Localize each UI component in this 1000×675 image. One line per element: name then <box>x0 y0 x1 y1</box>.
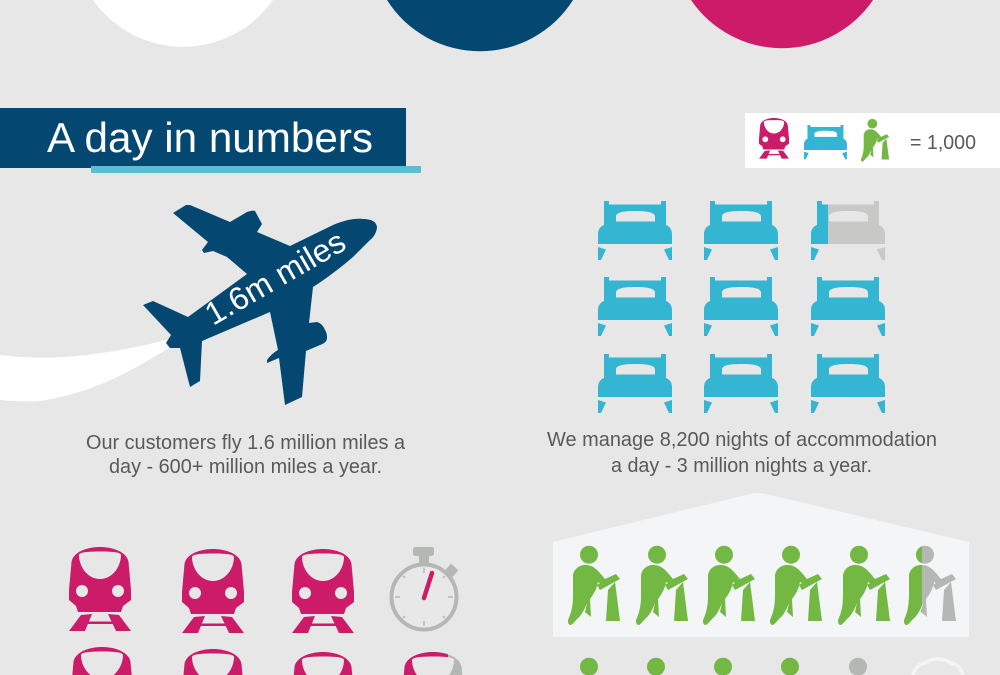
partial person <box>904 546 956 625</box>
navy circle <box>387 0 573 51</box>
airplane: 1.6m miles <box>198 223 352 332</box>
partial bed <box>811 201 885 260</box>
heading: A day in numbers: A day in numbers <box>47 114 373 161</box>
airplane <box>143 205 377 405</box>
caption: accommodation: We manage 8,200 nights of accommodation <box>547 429 937 451</box>
people chart <box>568 546 956 675</box>
partial train <box>402 652 464 675</box>
pink circle <box>691 0 873 48</box>
panel: staff <box>553 493 969 637</box>
white circle <box>93 0 273 47</box>
legend: = 1,000 <box>910 132 976 154</box>
caption: accommodation: a day - 3 million nights a year. <box>611 455 872 477</box>
bed chart <box>598 201 885 413</box>
caption: miles: day - 600+ million miles a year. <box>109 456 382 478</box>
heading: A day in numbers <box>0 108 421 173</box>
caption: miles: Our customers fly 1.6 million miles a <box>86 432 406 454</box>
contrail <box>0 340 169 401</box>
train chart <box>69 547 464 675</box>
caption: accommodation <box>547 429 937 477</box>
icon: cloche outline <box>913 659 963 675</box>
legend <box>745 113 1000 168</box>
caption: miles <box>86 432 406 478</box>
icon: stopwatch <box>392 547 458 630</box>
